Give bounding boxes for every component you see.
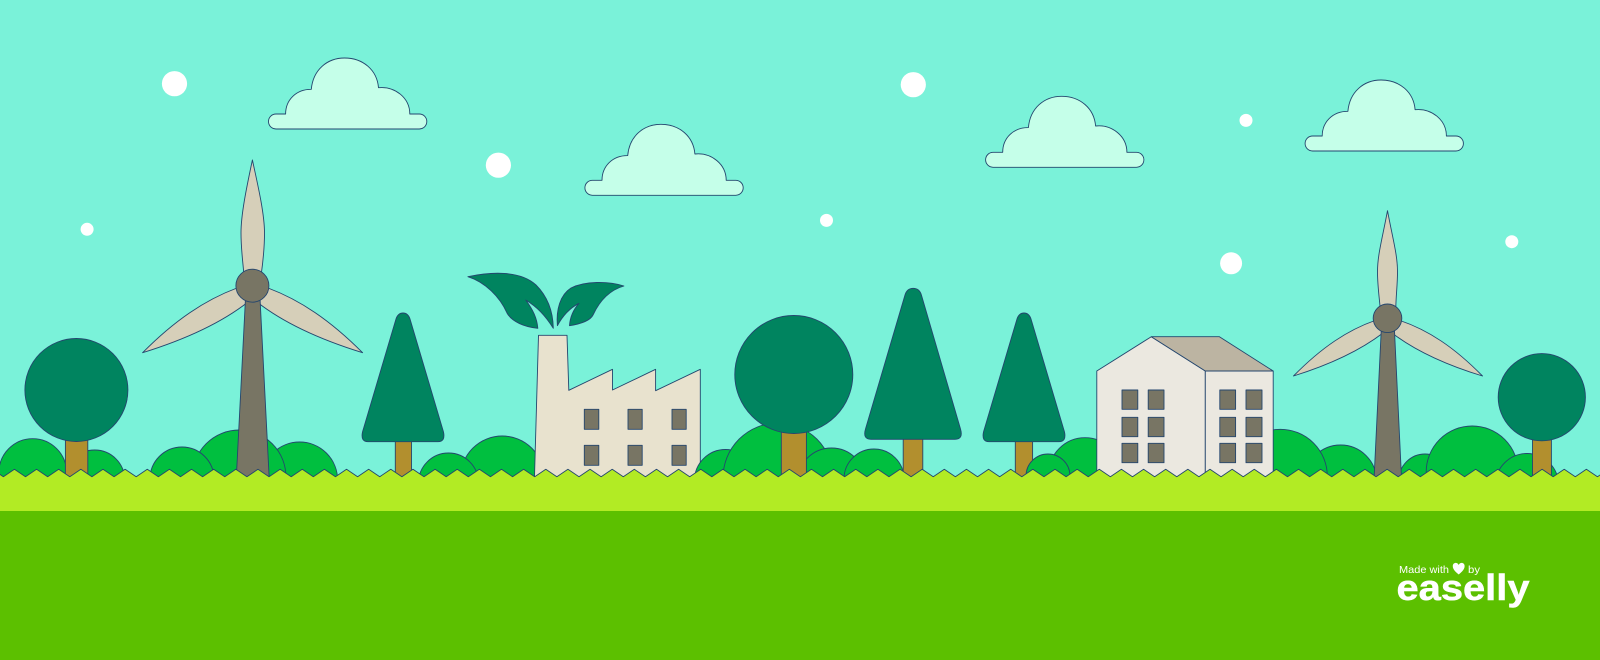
- small bush: [1026, 454, 1070, 498]
- factory windows: [584, 409, 686, 465]
- tree: cone 3: [983, 313, 1065, 480]
- wind turbine left: [143, 160, 363, 480]
- white sky dots: [81, 71, 1518, 274]
- factory: [468, 273, 700, 480]
- logo: Made with love by easelly: Made with: [1399, 564, 1449, 576]
- smoke leaves: [468, 273, 624, 328]
- cloud 1: [269, 58, 427, 129]
- cloud 3: [986, 96, 1144, 167]
- cloud 2: [585, 124, 743, 195]
- bushes behind left scene: [0, 430, 544, 523]
- logo: Made with love by easelly: by: [1468, 564, 1481, 576]
- clouds: [269, 58, 1463, 195]
- bushes right scene: [1399, 426, 1558, 518]
- logo: Made with love by easelly: easelly: [1396, 567, 1530, 608]
- tree: cone 2: [865, 288, 961, 480]
- house windows: [1122, 390, 1262, 463]
- bushes near cone 3: [1049, 438, 1121, 510]
- cloud 4: [1305, 80, 1463, 151]
- bushes right of house: [1234, 429, 1377, 523]
- tree: round right: [1498, 354, 1585, 480]
- ground: dark green field: [0, 511, 1600, 660]
- house: [1097, 337, 1273, 480]
- tree: round left: [25, 338, 128, 480]
- ground: light grass with zigzag edge: [0, 469, 1600, 520]
- tree: cone 1: [362, 313, 444, 480]
- icon: heart: [1453, 563, 1465, 574]
- bushes behind big tree: [694, 423, 904, 533]
- tree: big round: [735, 316, 853, 480]
- wind turbine right: [1294, 211, 1482, 480]
